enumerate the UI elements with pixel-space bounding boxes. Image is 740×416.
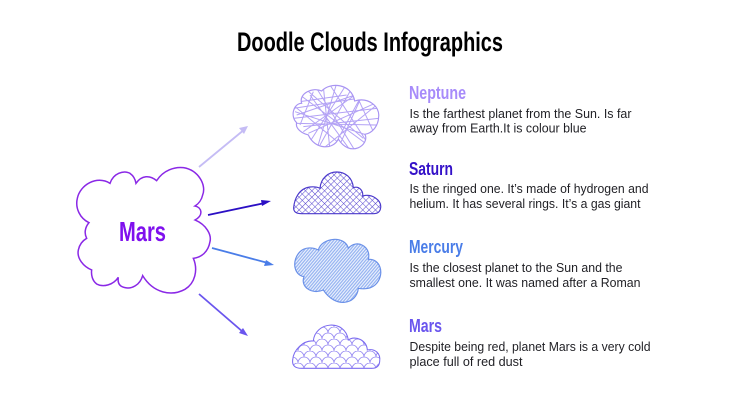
cloud icon: Mars scales bbox=[293, 325, 380, 368]
cloud icon: Mercury hatch bbox=[295, 239, 381, 302]
arrow to Neptune bbox=[199, 126, 248, 167]
text block: Neptune bbox=[409, 83, 632, 136]
text block: Mercury bbox=[409, 237, 641, 290]
text block: Neptune: Neptune bbox=[409, 83, 466, 103]
text block: Mercury: smallest one. It was named after a Roman bbox=[410, 276, 641, 290]
text block: Saturn: helium. It has several rings. It’s a gas giant bbox=[410, 197, 641, 211]
text block: Mars: Despite being red, planet Mars is a very cold bbox=[410, 340, 651, 354]
cloud icon: Saturn crosshatch bbox=[294, 172, 381, 214]
text block: Mars bbox=[409, 316, 651, 369]
text block: Neptune: away from Earth.It is colour blue bbox=[410, 122, 587, 136]
arrow to Mercury bbox=[212, 248, 274, 266]
text block: Neptune: Is the farthest planet from the Sun. Is far bbox=[410, 107, 632, 121]
text block: Mercury: Mercury bbox=[409, 237, 463, 257]
text block: Mars: Mars bbox=[409, 316, 442, 336]
cloud icon: Neptune scribble bbox=[293, 83, 380, 153]
title: Doodle Clouds Infographics bbox=[237, 27, 503, 57]
arrow to Saturn bbox=[208, 200, 271, 215]
text block: Saturn: Saturn bbox=[409, 159, 453, 179]
arrow to Mars bbox=[199, 294, 248, 336]
text block: Saturn: Is the ringed one. It’s made of hydrogen and bbox=[410, 182, 649, 196]
text block: Mercury: Is the closest planet to the Sun and the bbox=[410, 261, 623, 275]
central cloud: Mars: Mars bbox=[119, 216, 166, 247]
text block: Saturn bbox=[409, 159, 649, 211]
central cloud: Mars bbox=[77, 167, 210, 293]
text block: Mars: place full of red dust bbox=[410, 355, 523, 369]
